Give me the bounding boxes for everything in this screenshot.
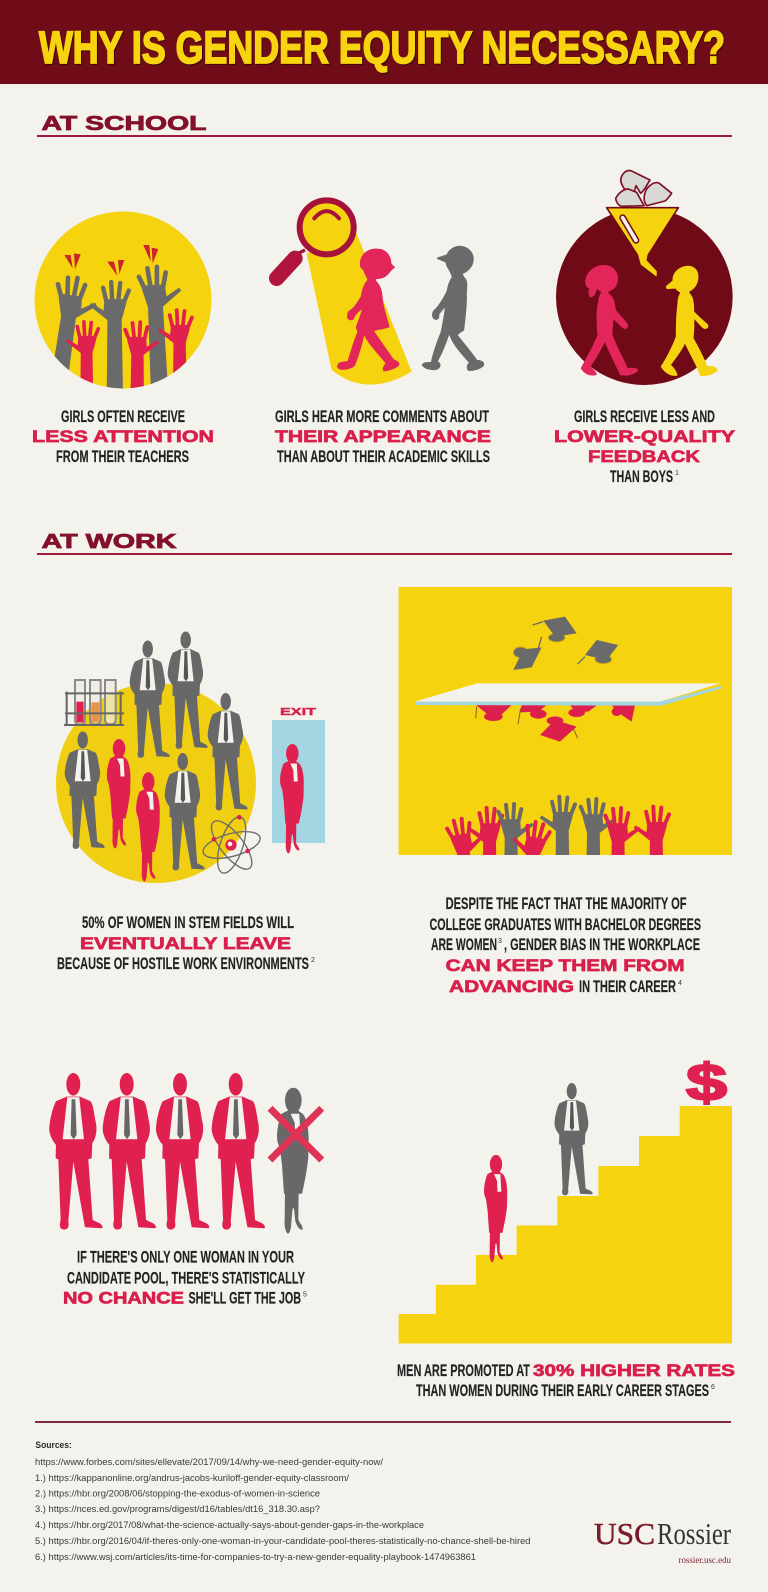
text: lower-quality feedback — [554, 407, 736, 486]
illustration: magnifier spotlight on girl, boy walking — [277, 200, 483, 385]
text: can keep them from advancing: IN THEIR CAREER — [579, 977, 676, 996]
text: lower-quality feedback: THAN BOYS — [610, 467, 673, 486]
icon: grey graduation caps above glass — [513, 617, 618, 670]
text: can keep them from advancing: 4 — [678, 980, 682, 987]
heading: at school: AT SCHOOL — [42, 113, 206, 135]
text: their appearance — [275, 407, 491, 466]
text: no chance: SHE'LL GET THE JOB — [188, 1288, 301, 1308]
sources list: 5.) https://hbr.org/2016/04/if-theres-only-one-woman-in-your-candidate-pool-theres-statistically-no-chance-shell-be-hired — [35, 1536, 530, 1547]
text: their appearance: THAN ABOUT THEIR ACADEMIC SKILLS — [277, 447, 490, 466]
sources list — [35, 1440, 530, 1563]
text: eventually leave: 50% OF WOMEN IN STEM FIELDS WILL — [82, 913, 294, 932]
sources list: Sources: — [35, 1440, 72, 1451]
text: 30% higher rates — [397, 1361, 735, 1400]
text: eventually leave: EVENTUALLY LEAVE — [80, 934, 291, 953]
text: lower-quality feedback: LOWER-QUALITY — [554, 427, 736, 446]
text: eventually leave — [57, 913, 315, 973]
text: their appearance: THEIR APPEARANCE — [275, 427, 491, 446]
logo: USC Rossier: rossier.usc.edu — [678, 1555, 731, 1565]
text: eventually leave: 2 — [311, 957, 315, 964]
text: can keep them from advancing: CAN KEEP THEM FROM — [446, 956, 685, 975]
logo: USC Rossier: Rossier — [657, 1516, 732, 1551]
text: no chance — [63, 1248, 307, 1308]
logo: USC Rossier — [594, 1516, 732, 1565]
logo: USC Rossier: USC — [594, 1516, 655, 1551]
text: no chance: IF THERE'S ONLY ONE WOMAN IN YOUR — [77, 1248, 294, 1266]
illustration: STEM workers in yellow circle — [56, 631, 263, 883]
sources list: https://www.forbes.com/sites/ellevate/2017/09/14/why-we-need-gender-equity-now/ — [35, 1457, 383, 1468]
icon: atom — [200, 814, 263, 876]
illustration: career staircase — [399, 1054, 732, 1344]
text: no chance: 5 — [303, 1292, 307, 1298]
text: less attention: FROM THEIR TEACHERS — [56, 447, 189, 466]
illustration: exit door with woman — [272, 707, 325, 854]
icon: test tube rack — [64, 680, 124, 726]
text: less attention: GIRLS OFTEN RECEIVE — [61, 407, 185, 426]
icon: red graduation caps below glass — [476, 705, 635, 742]
illustration: funnel feedback over girl and boy — [556, 171, 733, 385]
sources list: 4.) https://hbr.org/2017/08/what-the-science-actually-says-about-gender-gaps-in-the-workplace — [35, 1520, 424, 1531]
text: less attention — [32, 407, 214, 466]
icon: red X — [270, 1108, 322, 1160]
text: lower-quality feedback: 1 — [675, 470, 679, 477]
icon: dollar sign: $ — [686, 1054, 727, 1112]
text: lower-quality feedback: FEEDBACK — [588, 447, 701, 466]
text: eventually leave: BECAUSE OF HOSTILE WORK ENVIRONMENTS — [57, 954, 309, 973]
text: 30% higher rates: MEN ARE PROMOTED AT — [397, 1361, 530, 1380]
sources list: 1.) https://kappanonline.org/andrus-jacobs-kuriloff-gender-equity-classroom/ — [35, 1473, 349, 1484]
heading: at work: AT WORK — [42, 531, 177, 553]
illustration: exit door with woman: EXIT — [280, 707, 316, 718]
sources list: 2.) https://hbr.org/2008/06/stopping-the-exodus-of-women-in-science — [35, 1489, 320, 1500]
text: their appearance: GIRLS HEAR MORE COMMENTS ABOUT — [275, 407, 489, 426]
text: can keep them from advancing: ADVANCING — [449, 977, 574, 996]
text: less attention: LESS ATTENTION — [32, 427, 214, 446]
text: can keep them from advancing: ARE WOMEN — [431, 935, 497, 954]
illustration: glass ceiling panel — [398, 587, 732, 855]
header banner — [0, 0, 768, 84]
sources list: 6.) https://www.wsj.com/articles/its-time-for-companies-to-try-a-new-gender-equality-playbook-1474963861 — [35, 1552, 476, 1563]
sources list: 3.) https://nces.ed.gov/programs/digest/d16/tables/dt16_318.30.asp? — [35, 1504, 320, 1515]
illustration: four men and crossed-out woman — [49, 1073, 322, 1234]
text: 30% higher rates: 30% HIGHER RATES — [533, 1361, 735, 1380]
text: no chance: CANDIDATE POOL, THERE'S STATISTICALLY — [67, 1268, 305, 1288]
text: can keep them from advancing — [430, 894, 701, 996]
text: 30% higher rates: 6 — [711, 1384, 715, 1391]
text: can keep them from advancing: 3 — [498, 938, 502, 945]
icon: raised hands at bottom of panel — [445, 794, 671, 855]
illustration: raised hands in yellow circle — [34, 212, 212, 388]
icon: glass ceiling — [415, 683, 722, 706]
text: no chance: NO CHANCE — [63, 1288, 184, 1308]
